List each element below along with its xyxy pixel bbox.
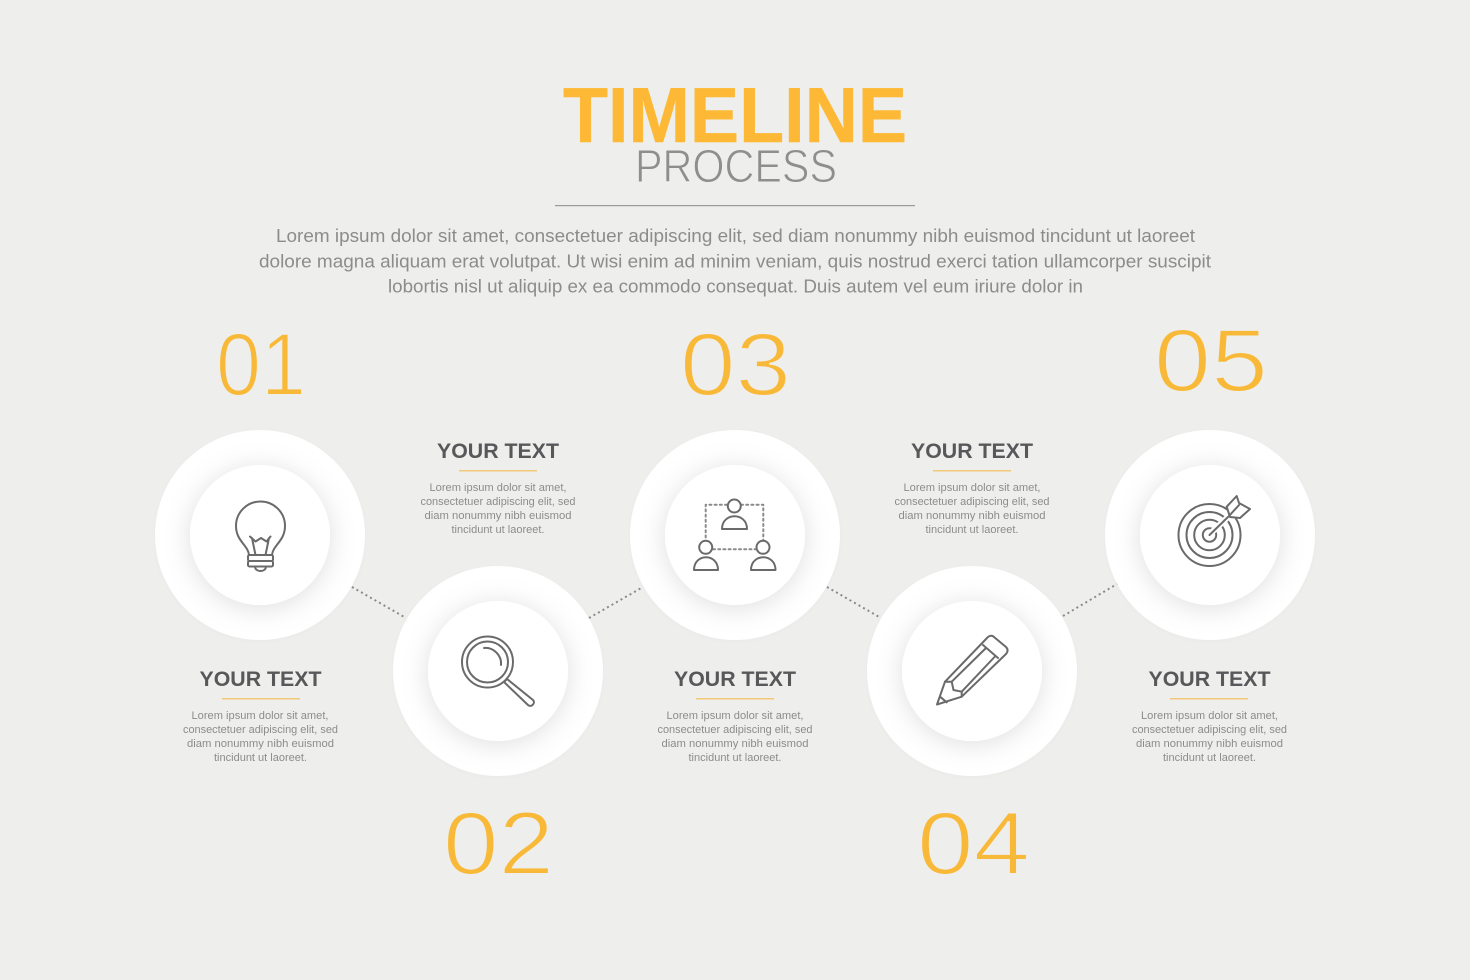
- outer circle 04: [867, 566, 1077, 776]
- label 01: diam nonummy nibh euismod: [187, 738, 334, 750]
- intro paragraph: dolore magna aliquam erat volutpat. Ut wisi enim ad minim veniam, quis nostrud exerci tation ullamcorper suscipit: [259, 252, 1211, 272]
- step 01: [155, 314, 365, 764]
- label 02: tincidunt ut laoreet.: [452, 524, 544, 536]
- label 01: tincidunt ut laoreet.: [214, 752, 307, 764]
- step 03: [630, 314, 840, 764]
- label 04: [894, 440, 1050, 536]
- step 02: [393, 440, 603, 893]
- label 04: consectetuer adipiscing elit, sed: [894, 496, 1050, 508]
- label 03: diam nonummy nibh euismod: [662, 738, 808, 750]
- icon: light bulb: [236, 501, 285, 571]
- inner circle 01: [190, 465, 330, 605]
- inner circle 02: [428, 601, 568, 741]
- intro paragraph: lobortis nisl ut aliquip ex ea commodo consequat. Duis autem vel eum iriure dolor in: [388, 276, 1083, 296]
- label 03: tincidunt ut laoreet.: [688, 752, 782, 764]
- icon: pencil: [937, 636, 1008, 704]
- step 04: [867, 440, 1077, 893]
- label 04: Lorem ipsum dolor sit amet,: [904, 482, 1040, 494]
- label 03: YOUR TEXT: [674, 668, 796, 691]
- label 04: tincidunt ut laoreet.: [926, 524, 1018, 536]
- label 04: diam nonummy nibh euismod: [898, 510, 1046, 522]
- number 03: 03: [680, 314, 791, 414]
- icon: magnifying glass: [462, 636, 534, 706]
- step 05: [1105, 310, 1315, 764]
- dotted connectors: [352, 584, 1117, 618]
- label 01: YOUR TEXT: [200, 668, 322, 691]
- outer circle 05: [1105, 430, 1315, 640]
- label 05: [1132, 668, 1287, 764]
- label 01: consectetuer adipiscing elit, sed: [183, 724, 338, 736]
- inner circle 03: [665, 465, 805, 605]
- label 05: Lorem ipsum dolor sit amet,: [1141, 710, 1278, 722]
- label 03: consectetuer adipiscing elit, sed: [658, 724, 812, 736]
- label 05: diam nonummy nibh euismod: [1136, 738, 1283, 750]
- label 05: consectetuer adipiscing elit, sed: [1132, 724, 1287, 736]
- number 02: 02: [443, 793, 554, 893]
- number 01: 01: [216, 314, 306, 414]
- label 02: Lorem ipsum dolor sit amet,: [430, 482, 566, 494]
- label 04: YOUR TEXT: [911, 440, 1033, 463]
- number 05: 05: [1154, 310, 1268, 410]
- title divider: [555, 205, 915, 206]
- title: TIMELINE: TIMELINE: [563, 71, 907, 159]
- label 05: YOUR TEXT: [1148, 668, 1271, 691]
- label 02: YOUR TEXT: [437, 440, 559, 463]
- label 02: [420, 440, 576, 536]
- intro paragraph: Lorem ipsum dolor sit amet, consectetuer adipiscing elit, sed diam nonummy nibh euismod tincidunt ut laoreet: [276, 226, 1195, 246]
- icon: target with arrow: [1178, 496, 1250, 566]
- label 03: Lorem ipsum dolor sit amet,: [666, 710, 804, 722]
- intro paragraph: [259, 226, 1211, 296]
- label 02: consectetuer adipiscing elit, sed: [420, 496, 576, 508]
- subtitle: PROCESS: PROCESS: [635, 140, 837, 192]
- label 02: diam nonummy nibh euismod: [424, 510, 572, 522]
- outer circle 01: [155, 430, 365, 640]
- outer circle 03: [630, 430, 840, 640]
- inner circle 04: [902, 601, 1042, 741]
- label 01: Lorem ipsum dolor sit amet,: [192, 710, 328, 722]
- label 05: tincidunt ut laoreet.: [1163, 752, 1256, 764]
- label 01: [183, 668, 338, 764]
- number 04: 04: [917, 793, 1030, 893]
- inner circle 05: [1140, 465, 1280, 605]
- outer circle 02: [393, 566, 603, 776]
- icon: team: [694, 500, 776, 570]
- label 03: [658, 668, 812, 764]
